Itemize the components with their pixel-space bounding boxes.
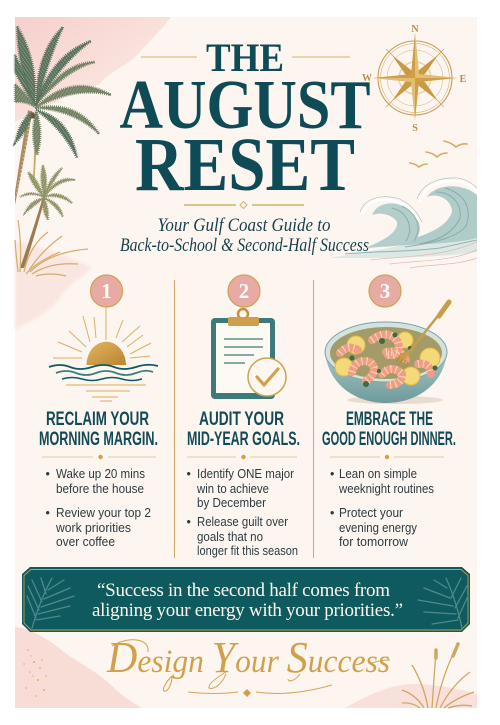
bullet list: • (186, 467, 191, 481)
panel: step 1 reclaim your morning margin (39, 275, 158, 549)
illustration: ocean waves (330, 178, 477, 268)
bullet list: Identify ONE major (197, 467, 294, 481)
bullet list (330, 467, 434, 549)
icon: sunrise over water (49, 307, 158, 401)
title ornaments (141, 57, 350, 208)
heading: RECLAIM YOUR (46, 409, 149, 430)
bullet list: win to achieve (196, 482, 269, 496)
shrimp (340, 334, 431, 385)
illustration: large palm tree (15, 26, 111, 205)
icon: compass rose: W (362, 73, 372, 84)
bullet list: goals that no (197, 530, 263, 544)
title: AUGUST (120, 67, 370, 144)
watercolor wash: top left (15, 17, 171, 122)
icon: shrimp bowl with fork (325, 302, 449, 404)
icon: compass rose: E (460, 74, 467, 85)
bullet list: Release guilt over (197, 515, 288, 529)
illustration: small palm tree (20, 165, 75, 268)
icon: seabirds (410, 141, 467, 167)
bullet list: by December (197, 496, 266, 510)
bullet list: Lean on simple (339, 467, 417, 481)
bullet list: • (330, 467, 334, 481)
bullet list: Protect your (339, 506, 403, 520)
flourish (188, 685, 332, 697)
bullet list: work priorities (55, 521, 131, 535)
bullet list: • (46, 467, 50, 481)
title: THE (206, 35, 284, 80)
divider (187, 455, 297, 459)
number badge 2 (228, 275, 260, 307)
bullet list: longer fit this season (197, 544, 298, 558)
panel: step 2 audit your mid-year goals (186, 275, 300, 558)
number badge 2: 2 (239, 279, 249, 303)
subtitle (120, 215, 369, 256)
watercolor wash: bottom left (15, 627, 142, 708)
number badge 1: 1 (101, 279, 112, 303)
divider (42, 455, 156, 459)
panel: step 3 embrace the good enough dinner (322, 275, 456, 549)
bullet list: • (46, 506, 50, 520)
number badge 3: 3 (380, 279, 390, 303)
heading: MORNING MARGIN. (39, 429, 158, 450)
signature: Design Your Success (106, 633, 390, 682)
icon: clipboard with check (211, 309, 286, 399)
divider (330, 455, 444, 459)
bullet list: evening energy (339, 521, 418, 535)
banner palm left (27, 578, 74, 628)
illustration: beach grass left (15, 220, 88, 276)
bullet list: • (186, 515, 191, 529)
icon: compass rose (362, 24, 467, 134)
bullet list: • (330, 506, 334, 520)
heading (39, 409, 158, 450)
quote text (92, 580, 403, 621)
gold speckles (23, 649, 47, 697)
bullet list: Wake up 20 mins (56, 467, 145, 481)
subtitle: Back-to-School & Second-Half Success (120, 235, 369, 256)
number badge 1 (90, 275, 122, 307)
bullet list (186, 467, 298, 558)
column dividers (174, 280, 314, 558)
bullet list: before the house (56, 482, 144, 496)
title (120, 35, 370, 207)
bullet list: for tomorrow (339, 535, 409, 549)
quote text: “Success in the second half comes from (97, 580, 390, 601)
bullet list: Review your top 2 (56, 506, 151, 520)
illustration: beach grass right (402, 644, 474, 708)
heading (187, 409, 300, 450)
banner palm right (418, 578, 468, 628)
bullet list: over coffee (56, 535, 115, 549)
number badge 3 (369, 275, 401, 307)
bullet list: weeknight routines (338, 482, 434, 496)
icon: compass rose: S (412, 123, 418, 134)
subtitle: Your Gulf Coast Guide to (158, 215, 330, 236)
watercolor wash: bottom right (345, 684, 477, 708)
title: RESET (135, 123, 355, 207)
bullet list (46, 467, 151, 549)
heading: MID-YEAR GOALS. (187, 429, 300, 450)
quote text: aligning your energy with your priorities.” (92, 600, 403, 621)
heading: EMBRACE THE (346, 409, 433, 430)
icon: compass rose: N (411, 24, 419, 35)
heading (322, 409, 456, 450)
watercolor wash: left middle (15, 240, 92, 330)
heading: AUDIT YOUR (199, 409, 284, 430)
quote banner (22, 567, 470, 632)
